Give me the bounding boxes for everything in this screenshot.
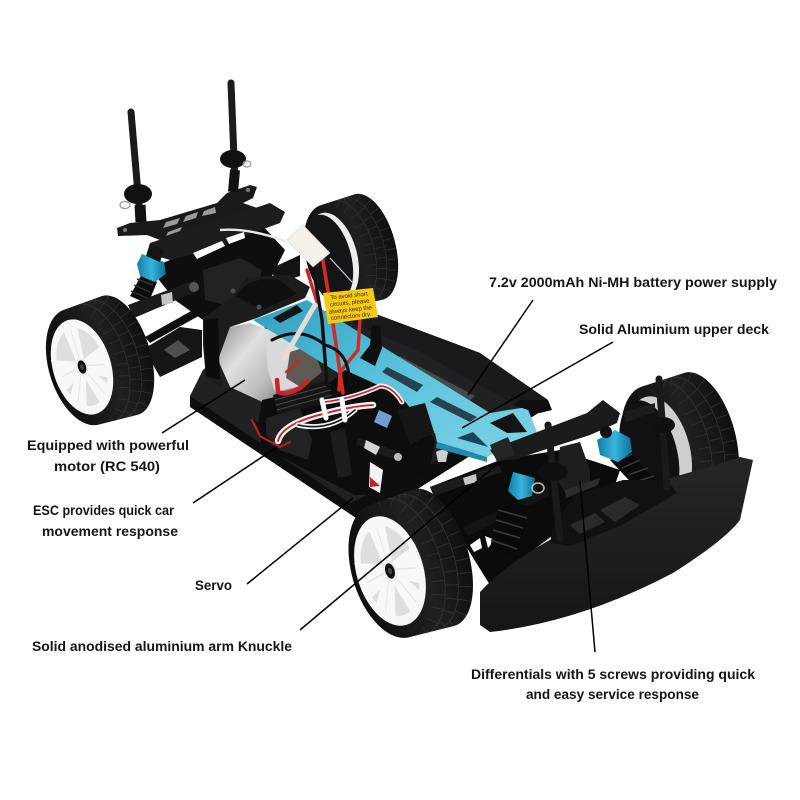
leader line: arm knuckle: [300, 462, 500, 630]
far front wheel: [605, 364, 752, 526]
upper deck, solid aluminium: [253, 300, 552, 462]
far rear wheel: [293, 187, 409, 316]
yellow warning label: [323, 288, 378, 324]
car chassis illustration: [32, 83, 753, 650]
label: upper deck: Solid Aluminium upper deck: [579, 321, 769, 337]
leader line: ESC: [193, 447, 277, 503]
label: arm knuckle: Solid anodised aluminium arm Knuckle: [32, 638, 292, 654]
leader line: motor: [162, 380, 245, 433]
label: differentials: and easy service response: [526, 686, 699, 702]
steering link: [356, 438, 402, 461]
label: ESC: [33, 502, 178, 539]
rear suspension arms: [128, 280, 204, 377]
servo wires: [252, 386, 402, 447]
label: motor: motor (RC 540): [54, 458, 160, 474]
leader line: upper deck: [462, 342, 613, 428]
label: ESC: ESC provides quick car: [33, 502, 174, 518]
rear cross bar and gearbox: [150, 203, 300, 325]
receiver: [397, 403, 434, 445]
chassis base plate: [190, 310, 548, 518]
label: motor: [27, 437, 189, 474]
front body posts: [538, 379, 675, 538]
label: ESC: movement response: [42, 523, 178, 539]
battery lead wires: [272, 255, 360, 393]
front foam bumper: [480, 457, 753, 632]
front mount plate: [550, 480, 677, 546]
servo label: [369, 462, 383, 493]
leader line: differentials: [580, 482, 595, 652]
yellow warning label: circuits, please: [330, 298, 370, 309]
wiring loom: [252, 255, 402, 447]
motor: [218, 323, 322, 407]
deck standoff: [436, 450, 448, 462]
label: motor: Equipped with powerful: [27, 437, 189, 453]
label: battery: 7.2v 2000mAh Ni-MH battery power supply: [489, 274, 777, 290]
servo saver arm: [330, 428, 352, 478]
rear body posts: [120, 83, 251, 222]
rear mount plate: [117, 185, 263, 240]
rear motor cover: [203, 275, 310, 387]
steering and lower arms: [430, 465, 550, 552]
front suspension and differential: [430, 400, 660, 585]
right front shock: [597, 403, 660, 492]
ESC heat sink: [273, 380, 332, 416]
near front wheel: [333, 479, 488, 650]
rear shock absorber: [130, 243, 166, 304]
leader line: servo: [247, 498, 353, 584]
differential housing: [556, 442, 600, 498]
yellow warning label: always keep the: [329, 305, 373, 316]
near rear wheel: [32, 287, 167, 436]
label: servo: Servo: [195, 577, 232, 593]
left front shock: [490, 472, 544, 558]
yellow warning label: To avoid short: [330, 292, 368, 301]
front cross bar: [490, 400, 620, 460]
leader line: battery: [468, 300, 533, 395]
small blue module: [374, 410, 392, 428]
label: differentials: [471, 666, 755, 702]
ESC case: [266, 408, 312, 460]
yellow warning label: connectors dry.: [331, 312, 372, 322]
battery connector: [220, 225, 352, 282]
label: differentials: Differentials with 5 screws providing quick: [471, 666, 755, 682]
electronics bay: ESC, servo and receiver: [258, 370, 448, 495]
